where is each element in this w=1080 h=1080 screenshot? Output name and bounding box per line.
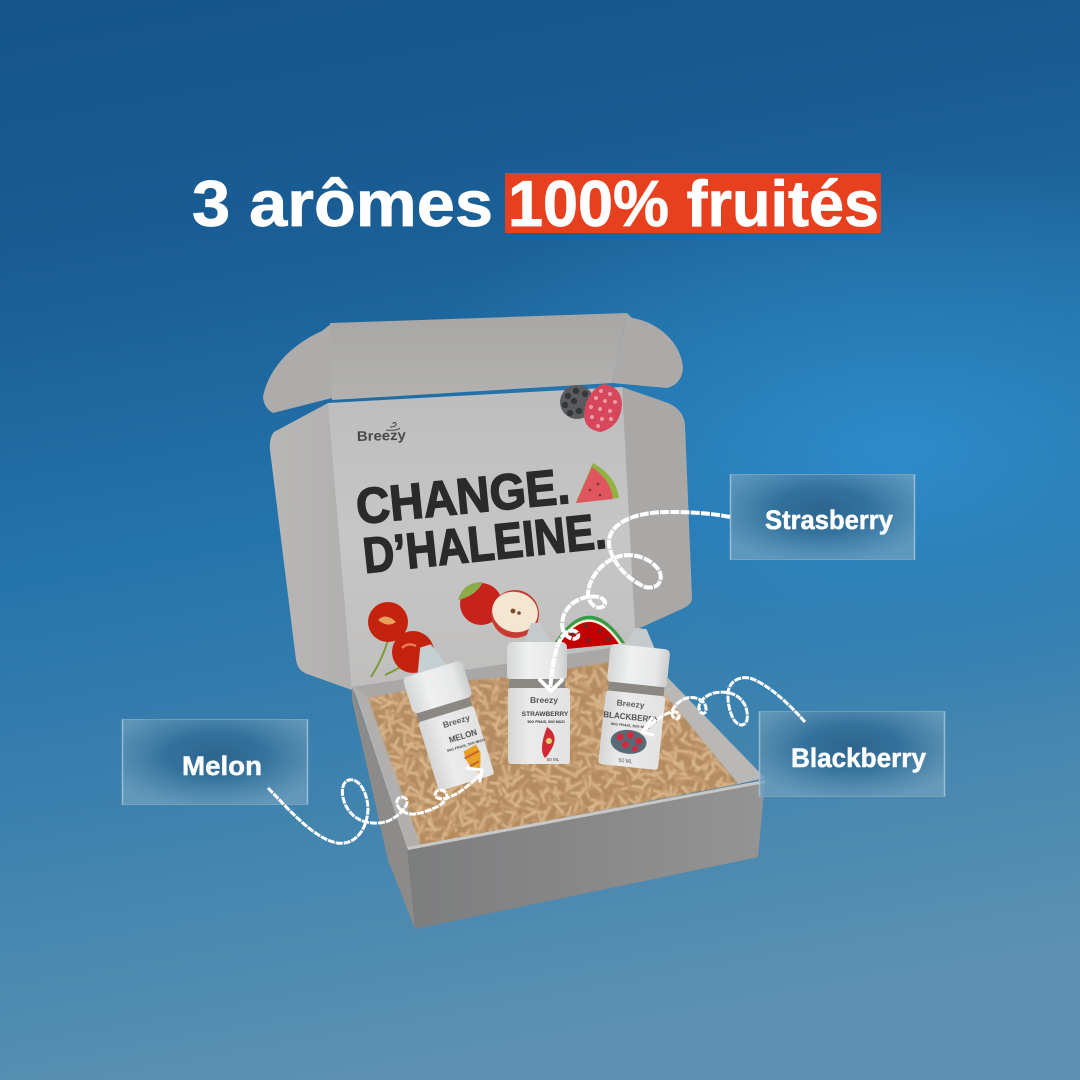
illustration: watermelon slice bbox=[576, 463, 619, 503]
illustration: blackberry and raspberry bbox=[560, 384, 622, 432]
title highlight box bbox=[505, 173, 881, 233]
bottle neck bbox=[608, 681, 665, 697]
label card: Blackberry bbox=[759, 711, 945, 797]
bottle cap bbox=[607, 643, 670, 689]
label card: Melon: Melon bbox=[182, 751, 262, 781]
left side wing bbox=[270, 403, 360, 690]
bottle neck bbox=[416, 697, 473, 723]
bottle label: Breezy bbox=[442, 712, 471, 730]
lid headline bbox=[354, 458, 609, 584]
bottle: melon bbox=[395, 637, 496, 792]
title bbox=[192, 167, 881, 240]
front wall bbox=[407, 780, 765, 929]
illustration: apples bbox=[458, 582, 542, 638]
back inner wall bbox=[352, 644, 665, 846]
arrow: Blackberry bbox=[642, 678, 805, 735]
label card: Strasberry: Strasberry bbox=[765, 505, 893, 535]
bottle label: MELON bbox=[448, 728, 478, 745]
top lid flap bbox=[330, 313, 627, 400]
label card: Blackberry: Blackberry bbox=[791, 743, 926, 773]
label card: Melon bbox=[122, 719, 308, 805]
bottle tip bbox=[411, 642, 446, 673]
arrow: Strasberry bbox=[540, 512, 730, 691]
front wall rim bbox=[407, 780, 765, 850]
bottle label: 50 ML bbox=[618, 758, 633, 765]
bottle cap bbox=[507, 642, 567, 680]
bottle label bbox=[418, 705, 495, 791]
title text: highlighted part: 100% fruités bbox=[508, 167, 879, 240]
bottle neck bbox=[509, 679, 565, 688]
left lid flap bbox=[263, 323, 332, 413]
arrow: Melon bbox=[268, 768, 483, 843]
bottle label: 50G FRAIS, 50G MUZI bbox=[446, 738, 485, 753]
lid headline: D’HALEINE. bbox=[360, 503, 609, 584]
right inner wall bbox=[640, 652, 765, 784]
logo on lid: Breezy bbox=[357, 427, 406, 444]
lid back panel bbox=[328, 387, 636, 692]
right side wing bbox=[622, 387, 692, 650]
bottle label: Breezy bbox=[530, 695, 558, 705]
left inner wall bbox=[352, 685, 421, 848]
open box lid bbox=[263, 313, 692, 692]
label card: Strasberry bbox=[730, 474, 915, 560]
illustration: watermelon half bbox=[550, 616, 625, 650]
bottle label bbox=[508, 688, 570, 764]
right lid flap bbox=[612, 313, 683, 388]
bottle label: STRAWBERRY bbox=[522, 711, 569, 718]
bottle: strawberry bbox=[507, 623, 570, 764]
left outer wall bbox=[352, 687, 415, 929]
box base bbox=[352, 644, 765, 929]
bottle label: 50G FRAIS, 50G MUZI bbox=[527, 720, 565, 724]
bottle label: 50G FRAIS, 50G MUZI bbox=[611, 722, 650, 730]
lid headline: CHANGE. bbox=[354, 458, 572, 535]
bottle label bbox=[598, 690, 666, 770]
bottle tip bbox=[624, 627, 657, 650]
illustration: cherries bbox=[368, 602, 434, 677]
bottle label: Breezy bbox=[616, 697, 645, 710]
bottle label: 50 ML bbox=[547, 757, 560, 762]
bottle label: BLACKBERRY bbox=[603, 710, 660, 725]
paper shred filling bbox=[368, 662, 738, 846]
bottle cap bbox=[402, 660, 473, 714]
title text: first part: 3 arômes bbox=[192, 167, 493, 240]
bottle: blackberry bbox=[598, 626, 672, 770]
bottle tip bbox=[524, 623, 551, 643]
